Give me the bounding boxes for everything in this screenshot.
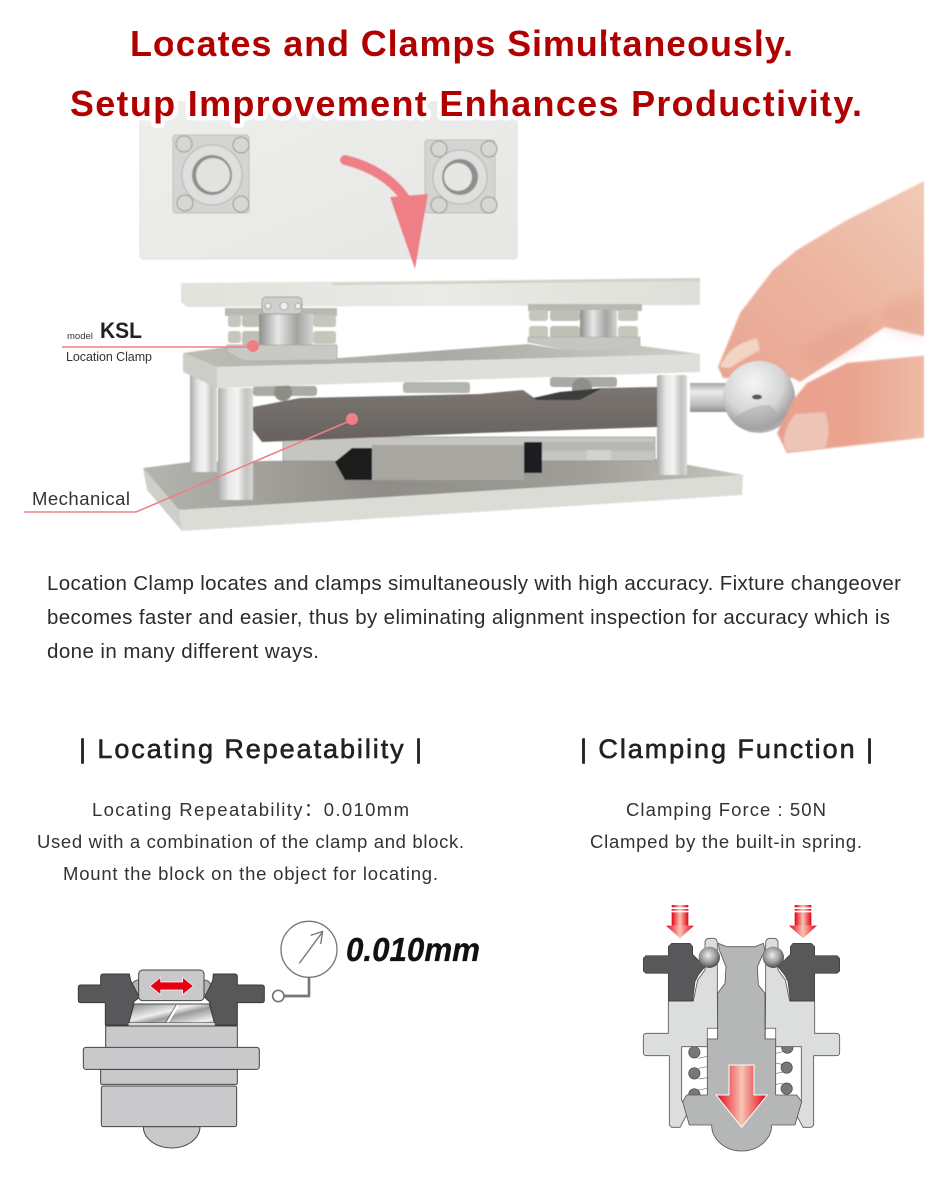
upper plate — [181, 278, 700, 307]
small right arrow — [789, 905, 817, 938]
taper cone — [128, 1004, 215, 1026]
clamping function text: Clamped by the built-in spring. — [590, 831, 862, 852]
hand: upper fingers — [718, 173, 940, 382]
red double arrow — [150, 977, 193, 995]
diagram: locating clamp — [78, 921, 337, 1148]
description text: becomes faster and easier, thus by eliminating alignment inspection for accuracy which is — [47, 606, 890, 629]
down arrow — [345, 160, 428, 269]
value: 0.010mm: 0.010mm — [346, 931, 480, 968]
ball mounts — [253, 377, 617, 401]
large red arrow — [716, 1065, 767, 1127]
title: Setup Improvement Enhances Productivity. — [70, 83, 862, 124]
callout: KSL location clamp: Location Clamp — [66, 350, 152, 364]
springs — [689, 1042, 793, 1100]
title: Locates and Clamps Simultaneously. — [130, 23, 793, 64]
product photo — [140, 102, 940, 531]
light housing — [643, 938, 840, 1127]
front pillars — [218, 375, 687, 500]
clamp balls — [131, 980, 211, 995]
left location clamp — [225, 297, 337, 360]
callout: mechanical — [24, 413, 358, 512]
callout: KSL location clamp — [62, 318, 259, 364]
workpiece plate — [140, 102, 517, 259]
locating repeatability text — [37, 799, 464, 884]
clamping function text: Clamping Force : 50N — [626, 799, 826, 820]
steel balls — [699, 947, 784, 968]
handle ball — [723, 361, 795, 433]
linear rail and carriage — [283, 437, 655, 480]
heading: locating repeatability: | Locating Repeatability | — [79, 734, 422, 764]
piston — [683, 943, 802, 1151]
callout: KSL location clamp: KSL — [100, 318, 142, 343]
right location clamp — [528, 304, 642, 352]
dark jaws — [643, 943, 840, 1001]
clamp body — [83, 1026, 259, 1127]
block top — [139, 970, 204, 1001]
locating repeatability text: Locating Repeatability：0.010mm — [92, 799, 409, 820]
heading: clamping function: | Clamping Function | — [580, 734, 873, 764]
middle plate — [183, 344, 700, 388]
locating repeatability text: Mount the block on the object for locating. — [63, 863, 438, 884]
finger nail — [720, 338, 760, 368]
back pillar — [190, 372, 217, 472]
bottom plate — [143, 456, 743, 531]
mechanical block — [253, 387, 657, 442]
clamping function text — [590, 799, 862, 852]
thumb nail — [784, 412, 828, 452]
description text: Location Clamp locates and clamps simultaneously with high accuracy. Fixture changeover — [47, 572, 901, 595]
title — [70, 23, 862, 124]
hand: thumb — [777, 354, 940, 453]
dial gauge — [273, 921, 337, 1002]
hand: finger crease shading — [819, 296, 924, 371]
callout: KSL location clamp: model — [67, 331, 93, 342]
callout: mechanical: Mechanical — [32, 488, 130, 509]
openings — [707, 1028, 776, 1039]
dome — [143, 1127, 200, 1148]
handle rod — [690, 383, 740, 412]
locating repeatability text: Used with a combination of the clamp and block. — [37, 831, 464, 852]
dark jaws — [78, 974, 264, 1025]
description text — [47, 572, 901, 663]
description text: done in many different ways. — [47, 640, 319, 663]
small left arrow — [666, 905, 694, 938]
diagram: clamping function — [643, 905, 840, 1151]
hand — [718, 173, 940, 453]
